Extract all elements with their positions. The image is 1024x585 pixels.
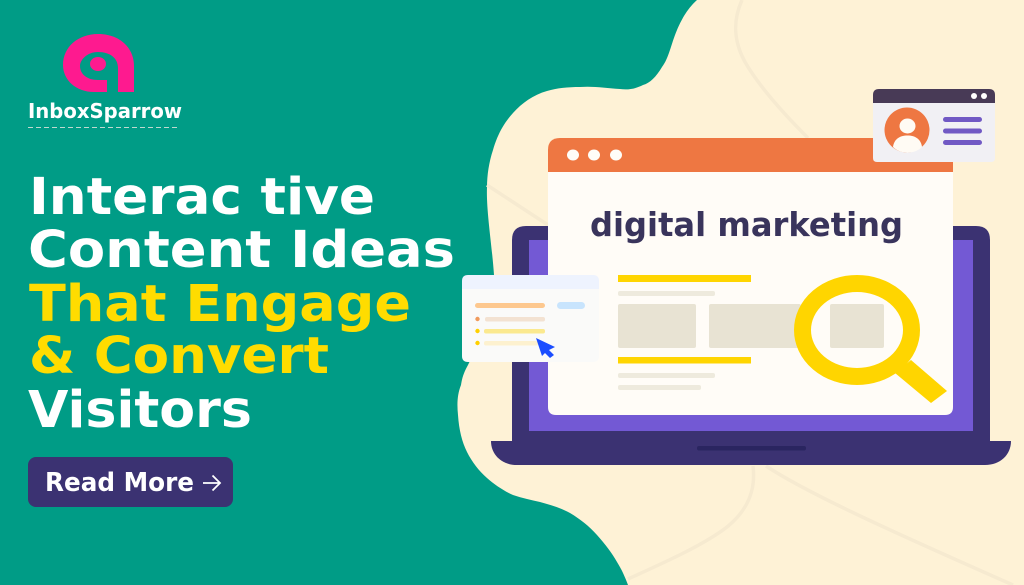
profile header bbox=[873, 89, 995, 103]
title: Content Ideas bbox=[28, 221, 455, 280]
panel body bbox=[462, 289, 599, 362]
logo bbox=[28, 34, 182, 128]
content lines bottom bbox=[618, 357, 751, 390]
laptop lid bbox=[512, 226, 990, 441]
title: Interac tive bbox=[29, 168, 375, 227]
laptop screen bbox=[529, 240, 973, 431]
logo wordmark: InboxSparrow bbox=[28, 99, 182, 123]
browser window bbox=[548, 138, 953, 415]
panel rows bbox=[475, 302, 585, 346]
browser header bbox=[548, 138, 953, 172]
floating list panel bbox=[462, 275, 599, 362]
profile window bbox=[873, 89, 995, 162]
heading: digital marketing: digital marketing bbox=[590, 205, 903, 244]
title bbox=[28, 168, 455, 440]
title: & Convert bbox=[29, 327, 329, 386]
icon: arrow bbox=[203, 476, 220, 490]
icon: magnifying glass bbox=[802, 284, 947, 403]
cream blob background bbox=[457, 0, 1024, 585]
read more button: Read More bbox=[45, 468, 194, 498]
read more button bbox=[28, 457, 233, 507]
browser dots bbox=[567, 150, 622, 160]
laptop base bbox=[491, 441, 1011, 465]
profile lines bbox=[943, 117, 982, 145]
title: That Engage bbox=[29, 275, 411, 334]
laptop notch bbox=[697, 446, 806, 450]
content cards bbox=[618, 304, 884, 348]
content lines top bbox=[618, 275, 751, 296]
icon: cursor bbox=[536, 338, 555, 358]
browser body bbox=[548, 172, 953, 415]
profile body bbox=[873, 103, 995, 162]
logo mark bbox=[63, 34, 134, 92]
title: Visitors bbox=[28, 381, 252, 440]
panel header bbox=[462, 275, 599, 289]
laptop bbox=[491, 226, 1011, 465]
icon: avatar bbox=[884, 108, 930, 152]
